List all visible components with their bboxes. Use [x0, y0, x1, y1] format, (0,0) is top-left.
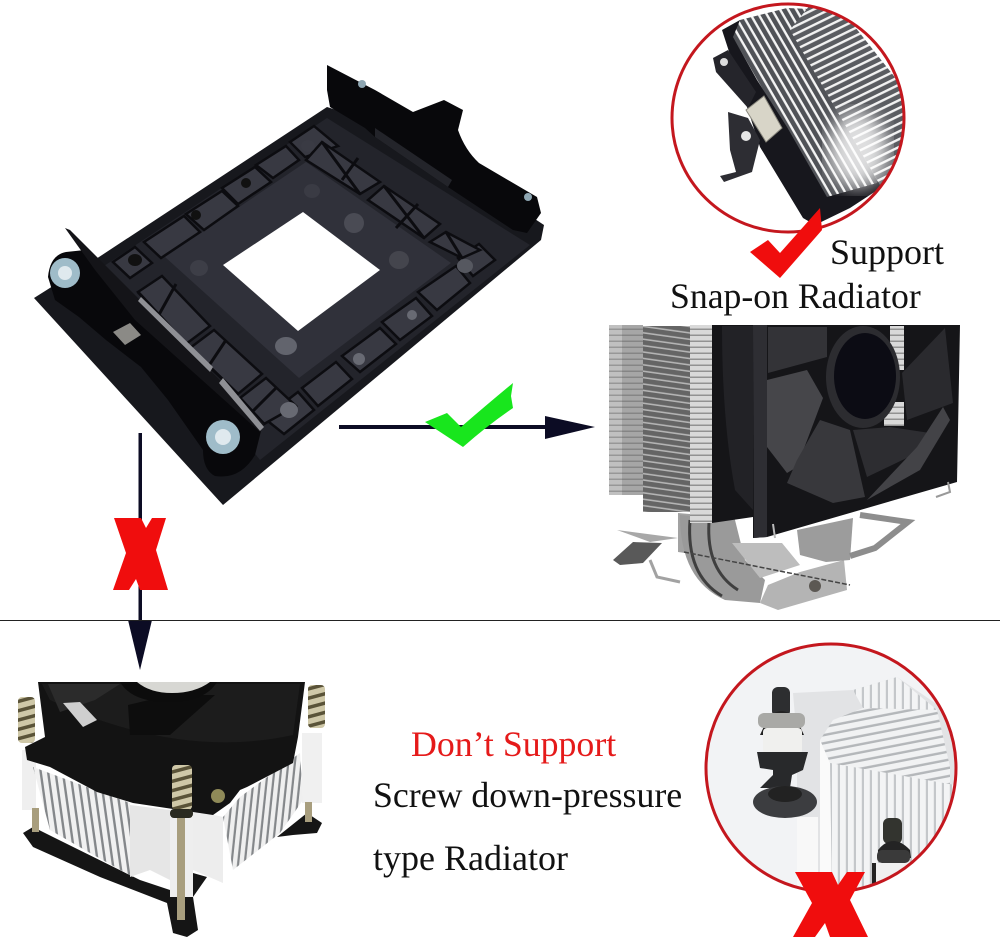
rear posts — [22, 750, 36, 810]
red ring — [672, 4, 904, 232]
square centre opening and raised frame — [165, 162, 451, 378]
icon: green check mark — [425, 383, 513, 447]
bracket base plate — [34, 107, 544, 505]
icon: red X on arrow — [113, 518, 168, 590]
left clip screws — [50, 258, 80, 288]
fan hub — [826, 326, 900, 428]
callout circle: snap-on clip detail — [672, 4, 905, 232]
X shaped ribs — [138, 142, 462, 424]
label: type Radiator: type Radiator — [373, 838, 568, 878]
label: Support: Support — [830, 232, 944, 272]
icon: red X on circle — [793, 872, 868, 937]
dark edge band under the fins — [722, 20, 886, 222]
divider line — [0, 620, 1000, 621]
arrow: bracket to snap-on cooler — [339, 416, 595, 439]
icon: red check mark — [750, 208, 822, 278]
tower cooler photo — [609, 325, 960, 610]
right retention clip — [327, 65, 541, 233]
small cooler photo (screw down type) — [18, 682, 325, 937]
fan frame front bar — [753, 325, 767, 538]
screw posts threads — [18, 697, 35, 743]
fan blades — [768, 327, 827, 373]
ribbed cells along edges — [113, 126, 495, 434]
arrow: bracket to screw-down cooler — [128, 433, 152, 670]
large screw post — [772, 687, 790, 713]
white heat sink — [793, 678, 954, 872]
wire clips — [936, 482, 950, 497]
small round bosses — [128, 140, 473, 418]
base plate — [23, 827, 207, 937]
left retention clip — [48, 250, 262, 477]
fan shroud — [25, 682, 305, 815]
metal strips on clip — [138, 297, 213, 372]
callout circle: screw post detail — [706, 644, 960, 900]
heat sink fins — [609, 325, 622, 495]
radiator fins in circle — [733, 8, 878, 197]
fan frame — [712, 325, 960, 538]
AM4 mounting bracket photo — [34, 65, 544, 505]
metal clip — [746, 96, 782, 142]
black clip arm and lever — [713, 50, 756, 108]
fan hub with label — [120, 682, 217, 702]
aluminium fins — [33, 767, 133, 877]
label: Don't Support: Don’t Support — [411, 724, 616, 764]
red ring — [706, 644, 956, 892]
label: Snap-on Radiator: Snap-on Radiator — [670, 276, 921, 316]
small screw — [883, 818, 902, 844]
front post — [170, 817, 193, 897]
label: Screw down-pressure: Screw down-pressure — [373, 775, 682, 815]
heat pipes and base — [613, 513, 908, 610]
